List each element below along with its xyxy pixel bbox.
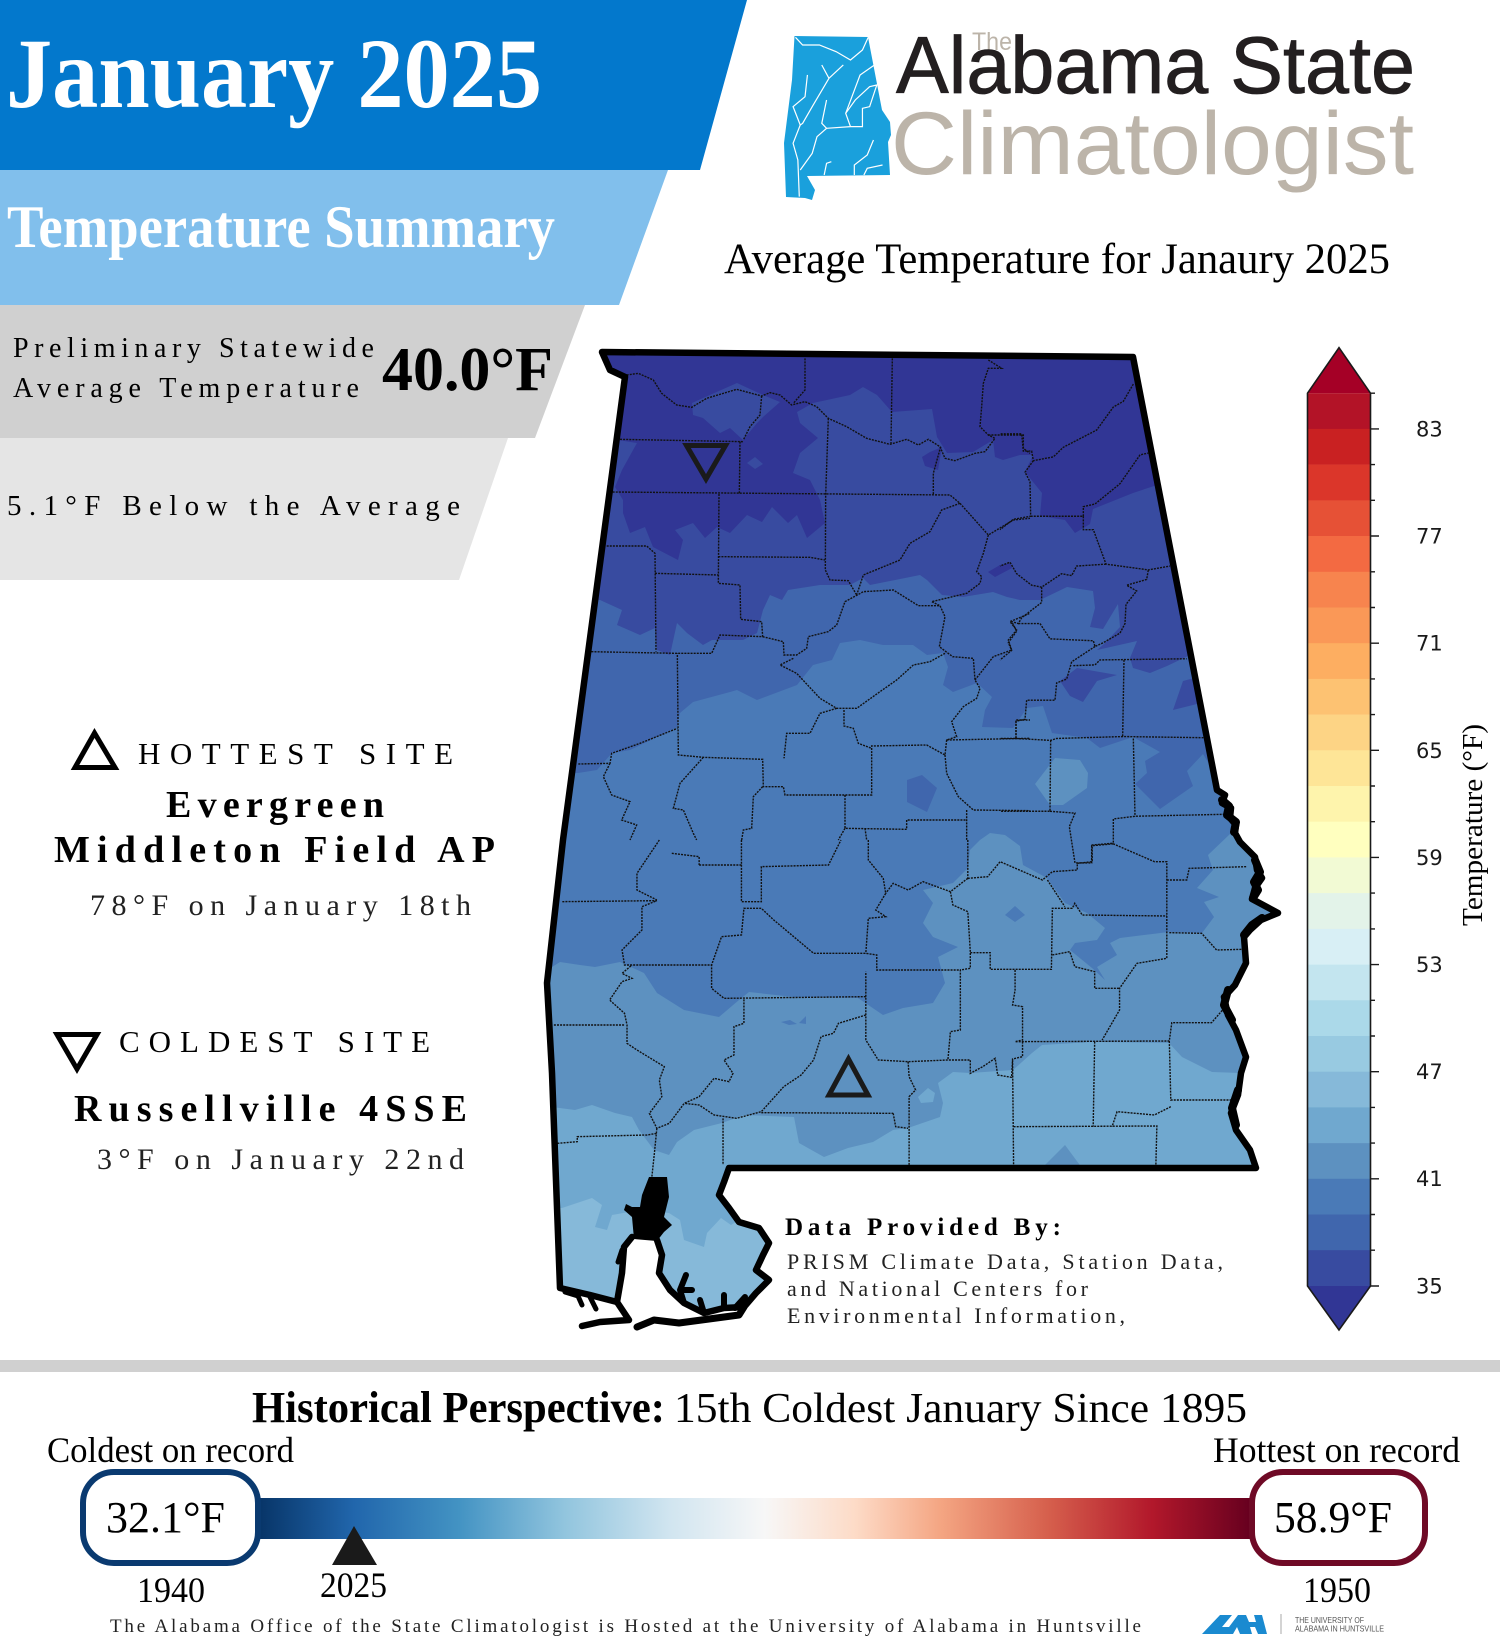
tick labels: 83 (1416, 418, 1443, 442)
panel: departure from average (0, 438, 508, 580)
logo: The Alabama State Climatologist (784, 21, 1415, 200)
label: preliminary statewide average temperature: Average Temperature (13, 373, 359, 404)
marker: 2025 position (320, 1526, 387, 1605)
county lines: south (554, 840, 1246, 1177)
county lines: northeast (1000, 384, 1223, 863)
data source note: and National Centers for (787, 1276, 1089, 1301)
banner: January 2025 (0, 0, 747, 170)
heading: Temperature Summary: Temperature Summary (7, 194, 555, 260)
heading: historical perspective: Historical Perspective: (252, 1383, 665, 1432)
panel: coldest site (57, 1024, 467, 1176)
value: 40.0 F: 40.0°F (382, 336, 553, 404)
site value: 3°F on January 22nd (97, 1143, 464, 1176)
map title: Average Temperature for Janaury 2025 (724, 236, 1390, 283)
map: Alabama average temperature (544, 348, 1282, 1330)
site name (54, 784, 495, 871)
wordmark: The: The (972, 28, 1012, 56)
divider bar (0, 1360, 1500, 1372)
tick labels: 53 (1416, 953, 1443, 977)
site value: 78°F on January 18th (90, 889, 471, 922)
footer credit: The Alabama Office of the State Climatologist is Hosted at the University of Alabama in Huntsville (110, 1616, 1141, 1637)
tick labels: 77 (1416, 524, 1443, 548)
label: preliminary statewide average temperature: Preliminary Statewide (13, 333, 374, 364)
callout: record low: 32.1°F (106, 1493, 225, 1542)
panel: hottest site (54, 733, 495, 922)
callout: record low (83, 1472, 258, 1610)
data source note (785, 1214, 1223, 1328)
icon: Alabama silhouette with rivers (784, 36, 891, 200)
site name: Middleton Field AP (54, 829, 495, 871)
gradient scale bar (250, 1498, 1260, 1539)
color bands (1308, 348, 1370, 1330)
year: 1950: 1950 (1303, 1570, 1371, 1610)
tick labels: 47 (1416, 1060, 1443, 1084)
text: 5.1 F below the average: 5.1°F Below the Average (7, 490, 460, 522)
label: coldest on record: Coldest on record (47, 1430, 294, 1470)
tick labels: 35 (1416, 1274, 1443, 1298)
title: January 2025: January 2025 (6, 18, 542, 129)
icon: hottest triangle (75, 733, 115, 768)
icon: coldest site marker (686, 446, 726, 479)
mobile bay (624, 1177, 672, 1241)
university name (1295, 1615, 1384, 1634)
university name: THE UNIVERSITY OF (1295, 1615, 1364, 1625)
site name: Evergreen (166, 784, 384, 826)
banner: Temperature Summary (0, 170, 668, 305)
colorbar label: Temperature (°F) (1457, 724, 1489, 926)
tick labels (1416, 418, 1443, 1298)
label: hottest on record: Hottest on record (1213, 1430, 1460, 1470)
wordmark: Climatologist: Climatologist (891, 93, 1414, 193)
state outline (547, 352, 1278, 1327)
icon: coldest triangle (57, 1034, 97, 1069)
university name: ALABAMA IN HUNTSVILLE (1295, 1624, 1384, 1634)
data source note: Environmental Information, (787, 1303, 1125, 1328)
callout: record high: 58.9°F (1274, 1493, 1392, 1542)
colorbar (1308, 348, 1489, 1330)
tick labels: 41 (1416, 1167, 1443, 1191)
callout: record high (1252, 1472, 1425, 1610)
heading: historical perspective: 15th Coldest January Since 1895 (674, 1386, 1247, 1432)
icon: hottest site marker (829, 1059, 868, 1095)
data source note: PRISM Climate Data, Station Data, (787, 1249, 1223, 1274)
site name: Russellville 4SSE (74, 1088, 467, 1130)
year: 1940: 1940 (137, 1570, 205, 1610)
marker: 2025 position: 2025 (320, 1565, 387, 1605)
label: coldest site: COLDEST SITE (119, 1024, 430, 1059)
tick labels: 71 (1416, 632, 1443, 656)
tick labels: 65 (1416, 739, 1443, 763)
county lines: north (578, 358, 1030, 840)
data source note: Data Provided By: (785, 1214, 1061, 1241)
wordmark: Alabama State: Alabama State (896, 21, 1415, 111)
heading: historical perspective (252, 1383, 1247, 1432)
icon: UAH mark (1202, 1615, 1267, 1634)
contours: temperature bands (550, 355, 1270, 1310)
label: preliminary statewide average temperature (13, 333, 374, 404)
logo: UAH (1202, 1614, 1384, 1634)
tick labels: 59 (1416, 846, 1443, 870)
panel: statewide average temperature (0, 305, 585, 438)
label: hottest site: HOTTEST SITE (138, 736, 453, 771)
